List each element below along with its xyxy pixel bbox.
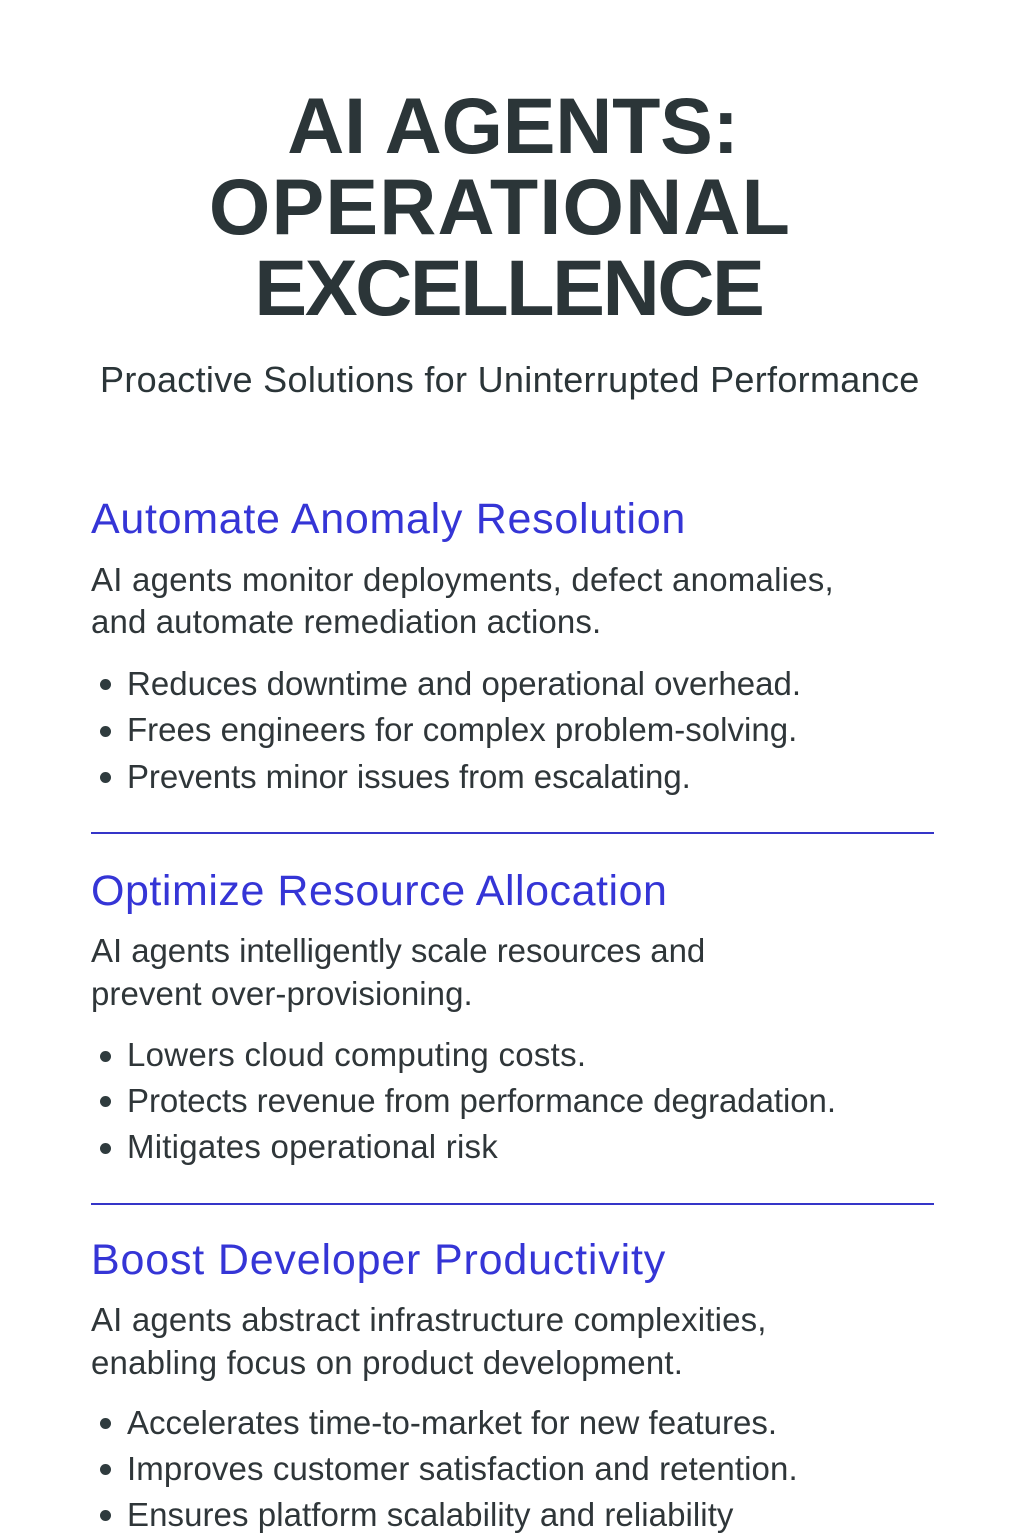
section: optimize resource allocation xyxy=(91,867,836,1165)
title xyxy=(209,81,791,332)
description: automate anomaly resolution: AI agents monitor deployments, defect anomalies, xyxy=(91,561,834,598)
description: boost developer productivity xyxy=(91,1301,767,1381)
heading: optimize resource allocation: Optimize Resource Allocation xyxy=(91,867,668,915)
bullet list: boost developer productivity: Ensures platform scalability and reliability xyxy=(127,1496,734,1533)
title: AI AGENTS: xyxy=(287,81,739,170)
heading: boost developer productivity: Boost Developer Productivity xyxy=(91,1236,666,1284)
bullet list: automate anomaly resolution xyxy=(100,665,801,795)
bullet list: boost developer productivity xyxy=(100,1404,798,1533)
section: automate anomaly resolution xyxy=(91,495,834,795)
description: optimize resource allocation xyxy=(91,932,705,1012)
section: boost developer productivity xyxy=(91,1236,798,1533)
description: optimize resource allocation: prevent over-provisioning. xyxy=(91,975,473,1012)
description: boost developer productivity: AI agents abstract infrastructure complexities, xyxy=(91,1301,767,1338)
subtitle: Proactive Solutions for Uninterrupted Performance xyxy=(100,359,920,400)
description: optimize resource allocation: AI agents intelligently scale resources and xyxy=(91,932,705,969)
bullet list: automate anomaly resolution: Reduces downtime and operational overhead. xyxy=(127,665,801,702)
bullet list: optimize resource allocation: Protects revenue from performance degradation. xyxy=(127,1082,836,1119)
title: EXCELLENCE xyxy=(254,243,763,332)
description: boost developer productivity: enabling focus on product development. xyxy=(91,1344,683,1381)
title: OPERATIONAL xyxy=(209,162,791,251)
description: automate anomaly resolution: and automate remediation actions. xyxy=(91,603,601,640)
bullet list: optimize resource allocation: Mitigates operational risk xyxy=(127,1128,498,1165)
heading: automate anomaly resolution: Automate Anomaly Resolution xyxy=(91,495,686,543)
bullet list: optimize resource allocation: Lowers cloud computing costs. xyxy=(127,1036,586,1073)
bullet list: optimize resource allocation xyxy=(100,1036,836,1165)
bullet list: boost developer productivity: Improves customer satisfaction and retention. xyxy=(127,1450,798,1487)
bullet list: automate anomaly resolution: Frees engineers for complex problem-solving. xyxy=(127,711,797,748)
bullet list: automate anomaly resolution: Prevents minor issues from escalating. xyxy=(127,758,691,795)
description: automate anomaly resolution xyxy=(91,561,834,640)
bullet list: boost developer productivity: Accelerates time-to-market for new features. xyxy=(127,1404,777,1441)
